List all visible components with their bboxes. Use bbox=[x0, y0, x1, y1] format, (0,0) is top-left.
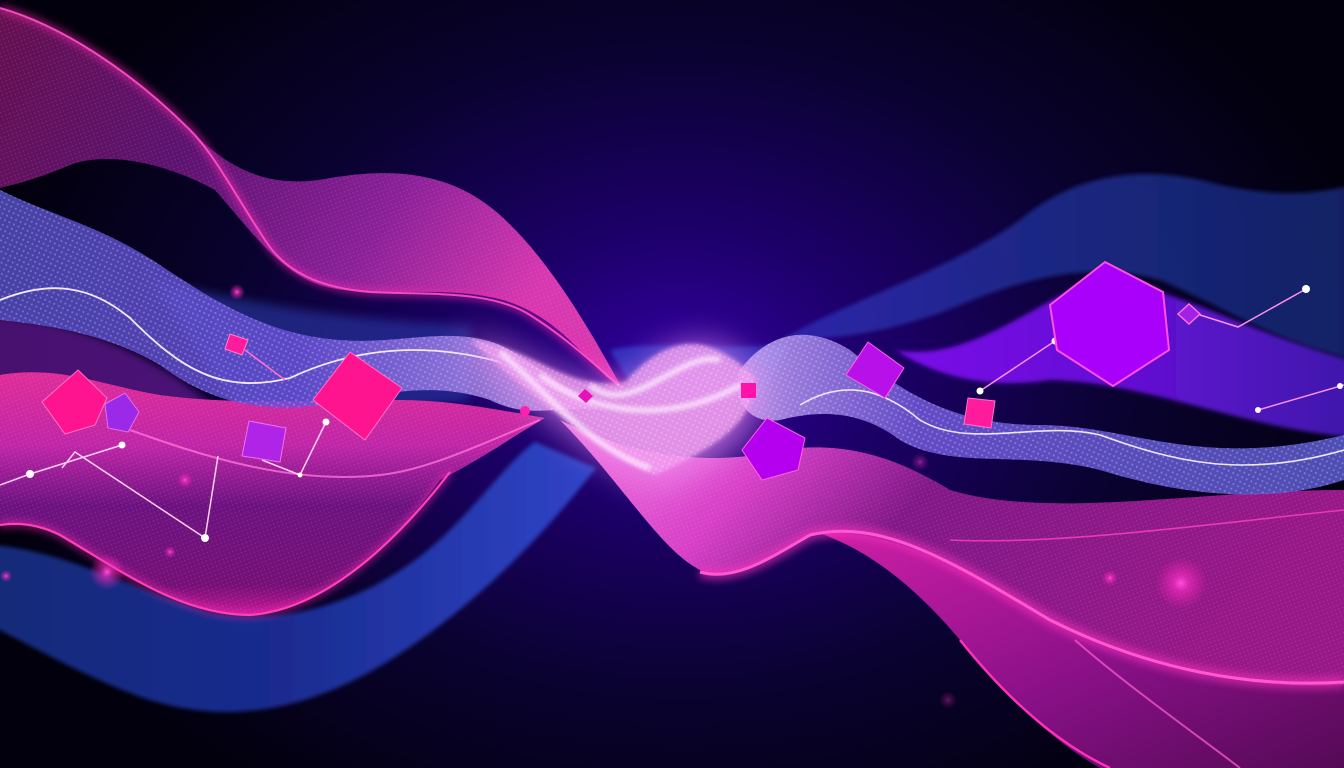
glowing centre knot bbox=[460, 335, 762, 490]
connector lines: right bbox=[980, 289, 1344, 410]
pink wave: lower right bbox=[810, 528, 1344, 768]
magenta wave: top left bbox=[0, 8, 622, 388]
connector lines: left bbox=[0, 350, 326, 538]
purple haze: between left bands bbox=[0, 315, 260, 440]
lavender mesh wave: right bbox=[737, 335, 1344, 494]
connector nodes: right bbox=[976, 285, 1343, 413]
pink wave: left bbox=[0, 372, 545, 615]
pink wave: centre right bbox=[560, 420, 1344, 686]
shape: large purple hexagon bbox=[1050, 262, 1169, 386]
blue wave: top right bbox=[610, 174, 1344, 400]
bright strand: right bbox=[800, 390, 1344, 465]
shape: pink pentagon left bbox=[42, 370, 107, 434]
shape: small diamond right bbox=[1178, 304, 1200, 324]
shape: small pink square centre bbox=[741, 383, 756, 398]
blue wave: bottom left bbox=[0, 280, 596, 712]
shape: purple diamond centre right bbox=[846, 342, 904, 398]
shape: purple square left bbox=[242, 421, 286, 462]
bright strand: left bbox=[0, 288, 500, 383]
shape: small pink square left bbox=[225, 334, 248, 355]
connector nodes: left bbox=[26, 418, 330, 542]
shape: purple pentagon centre bbox=[742, 418, 805, 480]
shape: purple pentagon left bbox=[105, 393, 139, 432]
glow dots bbox=[0, 284, 1207, 709]
shape: pink square right bbox=[964, 398, 995, 428]
lavender mesh wave: left bbox=[0, 190, 600, 411]
purple wave: right bbox=[895, 282, 1344, 438]
shape: large pink diamond bbox=[313, 352, 402, 440]
shape: tiny pink square centre bbox=[578, 389, 593, 403]
